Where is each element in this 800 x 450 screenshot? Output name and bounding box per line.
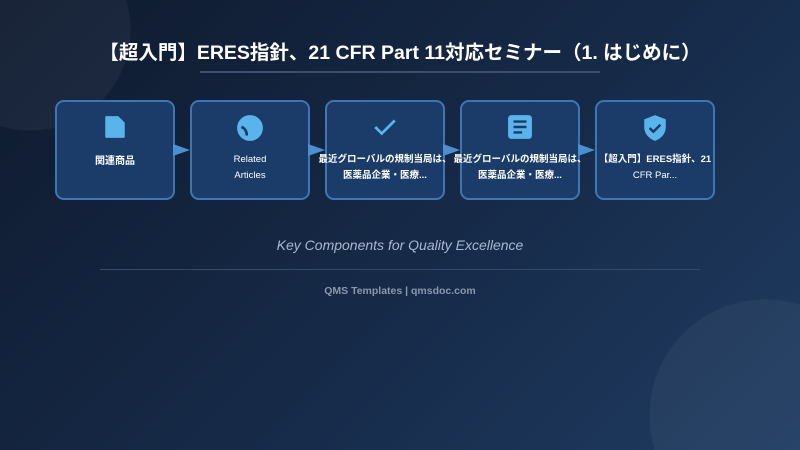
card: regulation 1: 医薬品企業・医療... (343, 170, 427, 181)
card: 関連商品 (55, 100, 175, 200)
card: Related Articles: Related (234, 154, 266, 165)
card: 関連商品: 関連商品 (95, 156, 135, 167)
icon: check (374, 120, 396, 136)
card: regulation 1 (325, 100, 445, 200)
card: seminar (595, 100, 715, 200)
footer: QMS Templates | qmsdoc.com (324, 285, 476, 297)
icon: shield (644, 115, 666, 141)
card: Related Articles (190, 100, 310, 200)
card: regulation 2: 最近グローバルの規制当局は、 (454, 154, 586, 165)
title: 【超入門】ERES指針、21 CFR Part 11対応セミナー（1. はじめに） (99, 42, 701, 64)
icon: text document (508, 115, 532, 139)
card: Related Articles: Articles (234, 170, 266, 181)
card: regulation 2: 医薬品企業・医療... (478, 170, 562, 181)
arrow (578, 144, 595, 156)
card: seminar: CFR Par... (633, 170, 677, 181)
arrow (308, 144, 325, 156)
arrow (443, 144, 460, 156)
subtitle: Key Components for Quality Excellence (277, 237, 523, 253)
card: regulation 1: 最近グローバルの規制当局は、 (319, 154, 451, 165)
card: regulation 2 (460, 100, 580, 200)
icon: document (105, 116, 125, 138)
arrow (173, 144, 190, 156)
icon: globe (237, 115, 263, 141)
card: seminar: 【超入門】ERES指針、21 (599, 154, 711, 165)
